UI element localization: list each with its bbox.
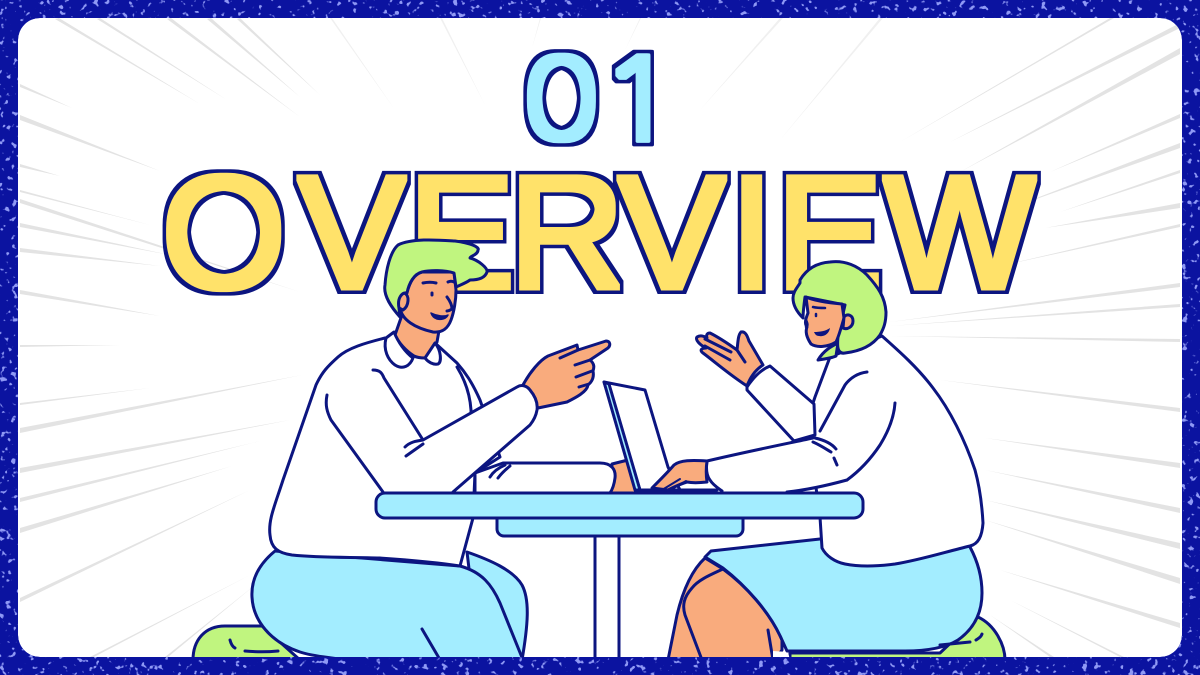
green stool right: [790, 617, 1005, 660]
man face: [400, 272, 456, 332]
man rear arm and hand: [610, 460, 636, 493]
woman face: [805, 297, 844, 346]
woman sleeve detail: [820, 372, 895, 480]
man rear trouser leg: [467, 552, 527, 660]
man torso: [270, 338, 500, 566]
woman typing hand: [652, 460, 707, 490]
man hair: [385, 240, 487, 317]
table top: [376, 493, 863, 518]
woman hair: [793, 262, 886, 353]
man collar: [385, 332, 413, 367]
woman skirt: [705, 539, 982, 651]
woman torso: [793, 336, 983, 566]
woman raised forearm: [747, 366, 815, 441]
table under-shelf: [497, 510, 743, 536]
illustration: woman: [652, 262, 1005, 660]
illustration: man: [193, 240, 636, 660]
illustration: laptop: [604, 382, 717, 490]
woman raised hand: [697, 332, 763, 386]
man trousers: [252, 551, 523, 660]
table: [376, 493, 863, 662]
section number: 01: [522, 44, 678, 156]
man facial features: [423, 281, 454, 311]
man neck: [395, 315, 440, 358]
man sleeve: [345, 386, 537, 492]
woman ear: [843, 315, 853, 329]
table leg: [595, 530, 619, 662]
man ear: [397, 293, 408, 310]
woman front sleeve: [706, 438, 847, 492]
woman neck scarf: [818, 343, 838, 360]
woman facial features: [806, 307, 825, 327]
man pointing hand: [523, 341, 610, 408]
green stool left: [193, 626, 300, 660]
heading: OVERVIEW: [162, 142, 1035, 322]
woman legs: [668, 558, 782, 660]
woman shoe: [773, 651, 790, 660]
